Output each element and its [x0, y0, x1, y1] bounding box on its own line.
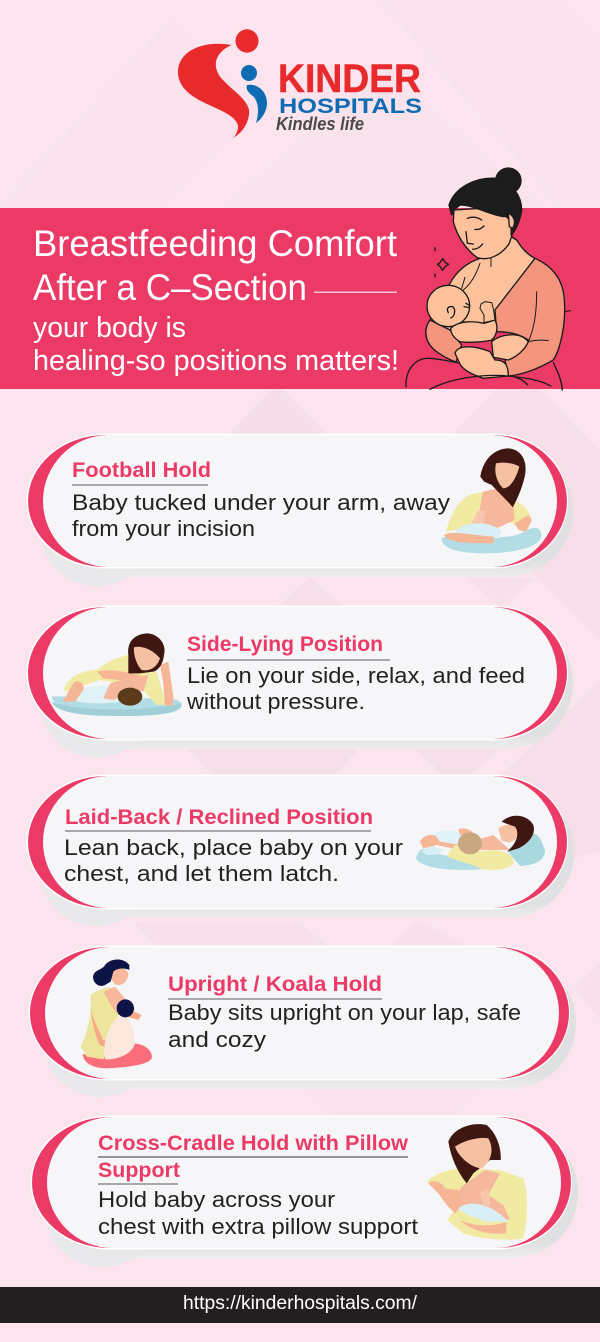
card: Side-Lying Position: [26, 606, 573, 757]
description: Hold baby across your: [98, 1187, 336, 1212]
logo wordmark: [276, 57, 422, 134]
banner title: healing-so positions matters!: [33, 345, 399, 377]
banner title: [33, 223, 399, 377]
card: Upright / Koala Hold: [29, 946, 576, 1097]
illustration: laid-back: [416, 816, 545, 870]
description: [64, 835, 404, 886]
description: chest, and let them latch.: [64, 861, 339, 886]
description: without pressure.: [186, 689, 365, 714]
description: [98, 1187, 419, 1239]
illustration: side-lying: [52, 633, 182, 716]
logo wordmark: HOSPITALS: [279, 95, 422, 118]
card shape: [26, 606, 573, 757]
description: and cozy: [168, 1027, 267, 1052]
logo wordmark: KINDER: [278, 57, 421, 101]
heading: Side-Lying Position: [187, 633, 383, 656]
card: Cross-Cradle Hold with Pillow Support: [30, 1116, 578, 1267]
description: Lie on your side, relax, and feed: [187, 663, 525, 688]
description: Baby tucked under your arm, away: [72, 490, 451, 515]
footer bar: [0, 1287, 600, 1323]
description: chest with extra pillow support: [98, 1214, 419, 1239]
illustration: cross-cradle: [427, 1124, 527, 1240]
illustration: mother nursing baby: [406, 168, 571, 390]
description: Baby sits upright on your lap, safe: [168, 1000, 521, 1025]
heading: Cross-Cradle Hold with Pillow: [98, 1132, 409, 1155]
logo wordmark: Kindles life: [276, 114, 364, 134]
description: from your incision: [72, 516, 255, 541]
footer url: https://kinderhospitals.com/: [183, 1293, 418, 1314]
heading: [98, 1132, 409, 1184]
description: [72, 490, 451, 541]
illustration: upright hold: [81, 960, 152, 1068]
illustration: football hold: [442, 448, 542, 553]
heading: Upright / Koala Hold: [168, 973, 382, 996]
banner title: your body is: [33, 312, 186, 344]
banner title: Breastfeeding Comfort: [33, 223, 398, 264]
heading: Laid-Back / Reclined Position: [65, 806, 373, 829]
logo mark: [178, 29, 267, 138]
description: [168, 1000, 521, 1052]
heading: Support: [98, 1159, 180, 1182]
banner: [0, 208, 600, 389]
card: Football Hold: [26, 434, 573, 586]
banner title: After a C–Section: [33, 267, 307, 308]
logo: Kinder Hospitals: [178, 29, 422, 138]
description: Lean back, place baby on your: [64, 835, 404, 860]
description: [186, 663, 525, 714]
card shape: [29, 946, 576, 1097]
card shape: [30, 1116, 578, 1267]
card shape: [26, 774, 574, 926]
heading: Football Hold: [72, 459, 211, 482]
card shape: [26, 434, 573, 586]
card: Laid-Back / Reclined Position: [26, 774, 574, 926]
